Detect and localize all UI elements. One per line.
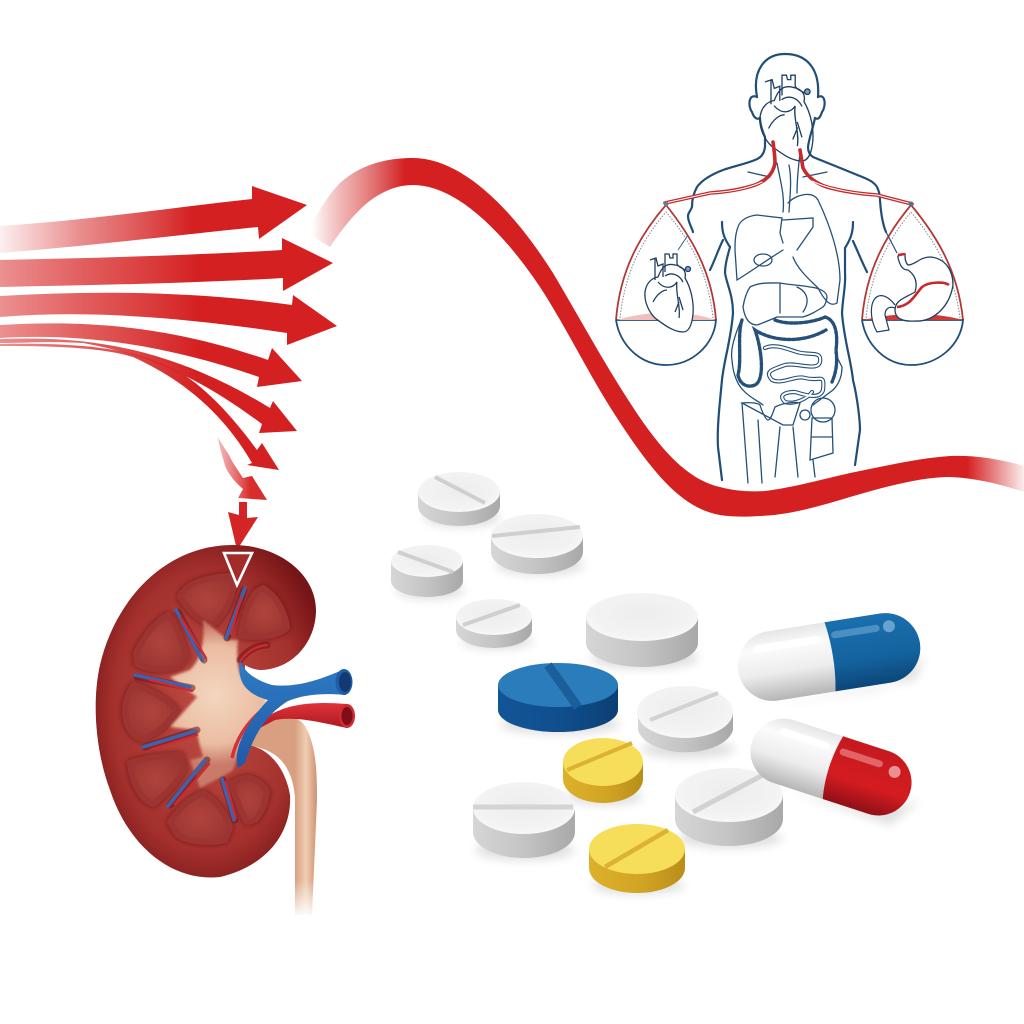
heart <box>645 254 693 332</box>
tablet 1 <box>418 472 500 526</box>
colon <box>738 317 837 386</box>
tablet shadows <box>396 507 925 894</box>
renal pelvis <box>170 620 267 788</box>
torso and arms <box>710 222 867 480</box>
pyramid top right <box>241 588 287 637</box>
arrow 5 <box>0 339 297 433</box>
kidney body <box>96 545 316 878</box>
tablet yellow 1 <box>563 738 643 803</box>
vessel shadows <box>137 590 267 820</box>
lungs <box>735 194 840 304</box>
artery lumen <box>342 707 352 725</box>
red neck vessels <box>665 142 912 204</box>
arrow 1 <box>0 186 307 253</box>
pyramid top centre <box>180 576 234 625</box>
lower navy outline <box>616 320 716 365</box>
pan fill <box>862 205 963 365</box>
upper red outline <box>616 205 716 320</box>
arrow 3 <box>0 293 337 345</box>
lower artery branch <box>232 710 262 758</box>
vessel blue <box>135 588 245 820</box>
thin organ outlines <box>732 75 842 483</box>
pyramid bottom <box>170 793 230 842</box>
pan fill <box>616 205 716 365</box>
tablet 8 <box>675 768 783 846</box>
vessel red <box>150 598 267 818</box>
tablet 2 <box>491 514 583 574</box>
hip lines <box>732 323 842 483</box>
gallbladder <box>754 254 772 266</box>
pan lens <box>617 312 716 320</box>
pouch <box>810 418 833 477</box>
upper red outline <box>862 205 963 320</box>
human anatomy figure <box>665 54 912 483</box>
arrow 4 <box>0 323 302 387</box>
duodenum <box>871 296 895 332</box>
pyramids <box>125 576 287 842</box>
knot <box>908 202 914 206</box>
dotted inner lines <box>620 212 713 318</box>
stomach <box>895 254 953 321</box>
connecting dashed line <box>678 235 688 250</box>
tablet blue <box>498 663 618 732</box>
hollow triangle marker <box>224 553 252 585</box>
vein end <box>336 669 352 695</box>
small intestine <box>765 346 823 403</box>
arrow 7 <box>218 437 267 500</box>
clavicles and trachea <box>748 153 827 212</box>
red wave curve <box>307 158 1024 517</box>
tablet 4 <box>456 599 532 648</box>
pyramid left <box>125 685 177 739</box>
pyramid lower right <box>231 778 267 822</box>
red stomach band <box>897 283 949 307</box>
pyramid upper left <box>136 615 187 669</box>
pyramid lower left <box>130 755 184 804</box>
artery end <box>339 704 355 728</box>
cardia ring <box>898 254 905 255</box>
left scale pan with heart <box>616 202 716 365</box>
kidney illustration <box>96 545 355 918</box>
arrow 8 <box>228 502 258 550</box>
head outline <box>756 54 818 97</box>
renal artery <box>256 703 347 730</box>
liver and spleen <box>743 283 827 325</box>
pan lens <box>864 314 963 320</box>
small vessels <box>135 588 267 820</box>
tablet 3 <box>391 545 463 597</box>
tablet 5 large <box>586 593 698 667</box>
ureter fade <box>290 880 322 918</box>
tablet 6 <box>637 686 733 752</box>
vein lumen <box>339 672 351 692</box>
heart in head <box>760 75 813 161</box>
capsule red/white <box>742 710 920 824</box>
arrows converging toward kidney <box>0 186 337 550</box>
capsule blue/white <box>733 608 925 706</box>
renal vein <box>237 660 346 768</box>
shoulders <box>688 118 886 232</box>
arrow 6 <box>0 344 279 470</box>
pills group <box>391 472 925 894</box>
lower navy outline <box>862 320 963 365</box>
ureter <box>243 716 317 915</box>
tablet 7 <box>473 782 575 858</box>
arrow 2 <box>0 238 333 291</box>
knot <box>664 202 668 206</box>
connecting line <box>886 232 897 253</box>
ears <box>749 96 825 119</box>
right scale pan with stomach <box>862 202 963 365</box>
tablet yellow 2 <box>589 824 685 893</box>
dotted inner lines <box>866 212 960 318</box>
